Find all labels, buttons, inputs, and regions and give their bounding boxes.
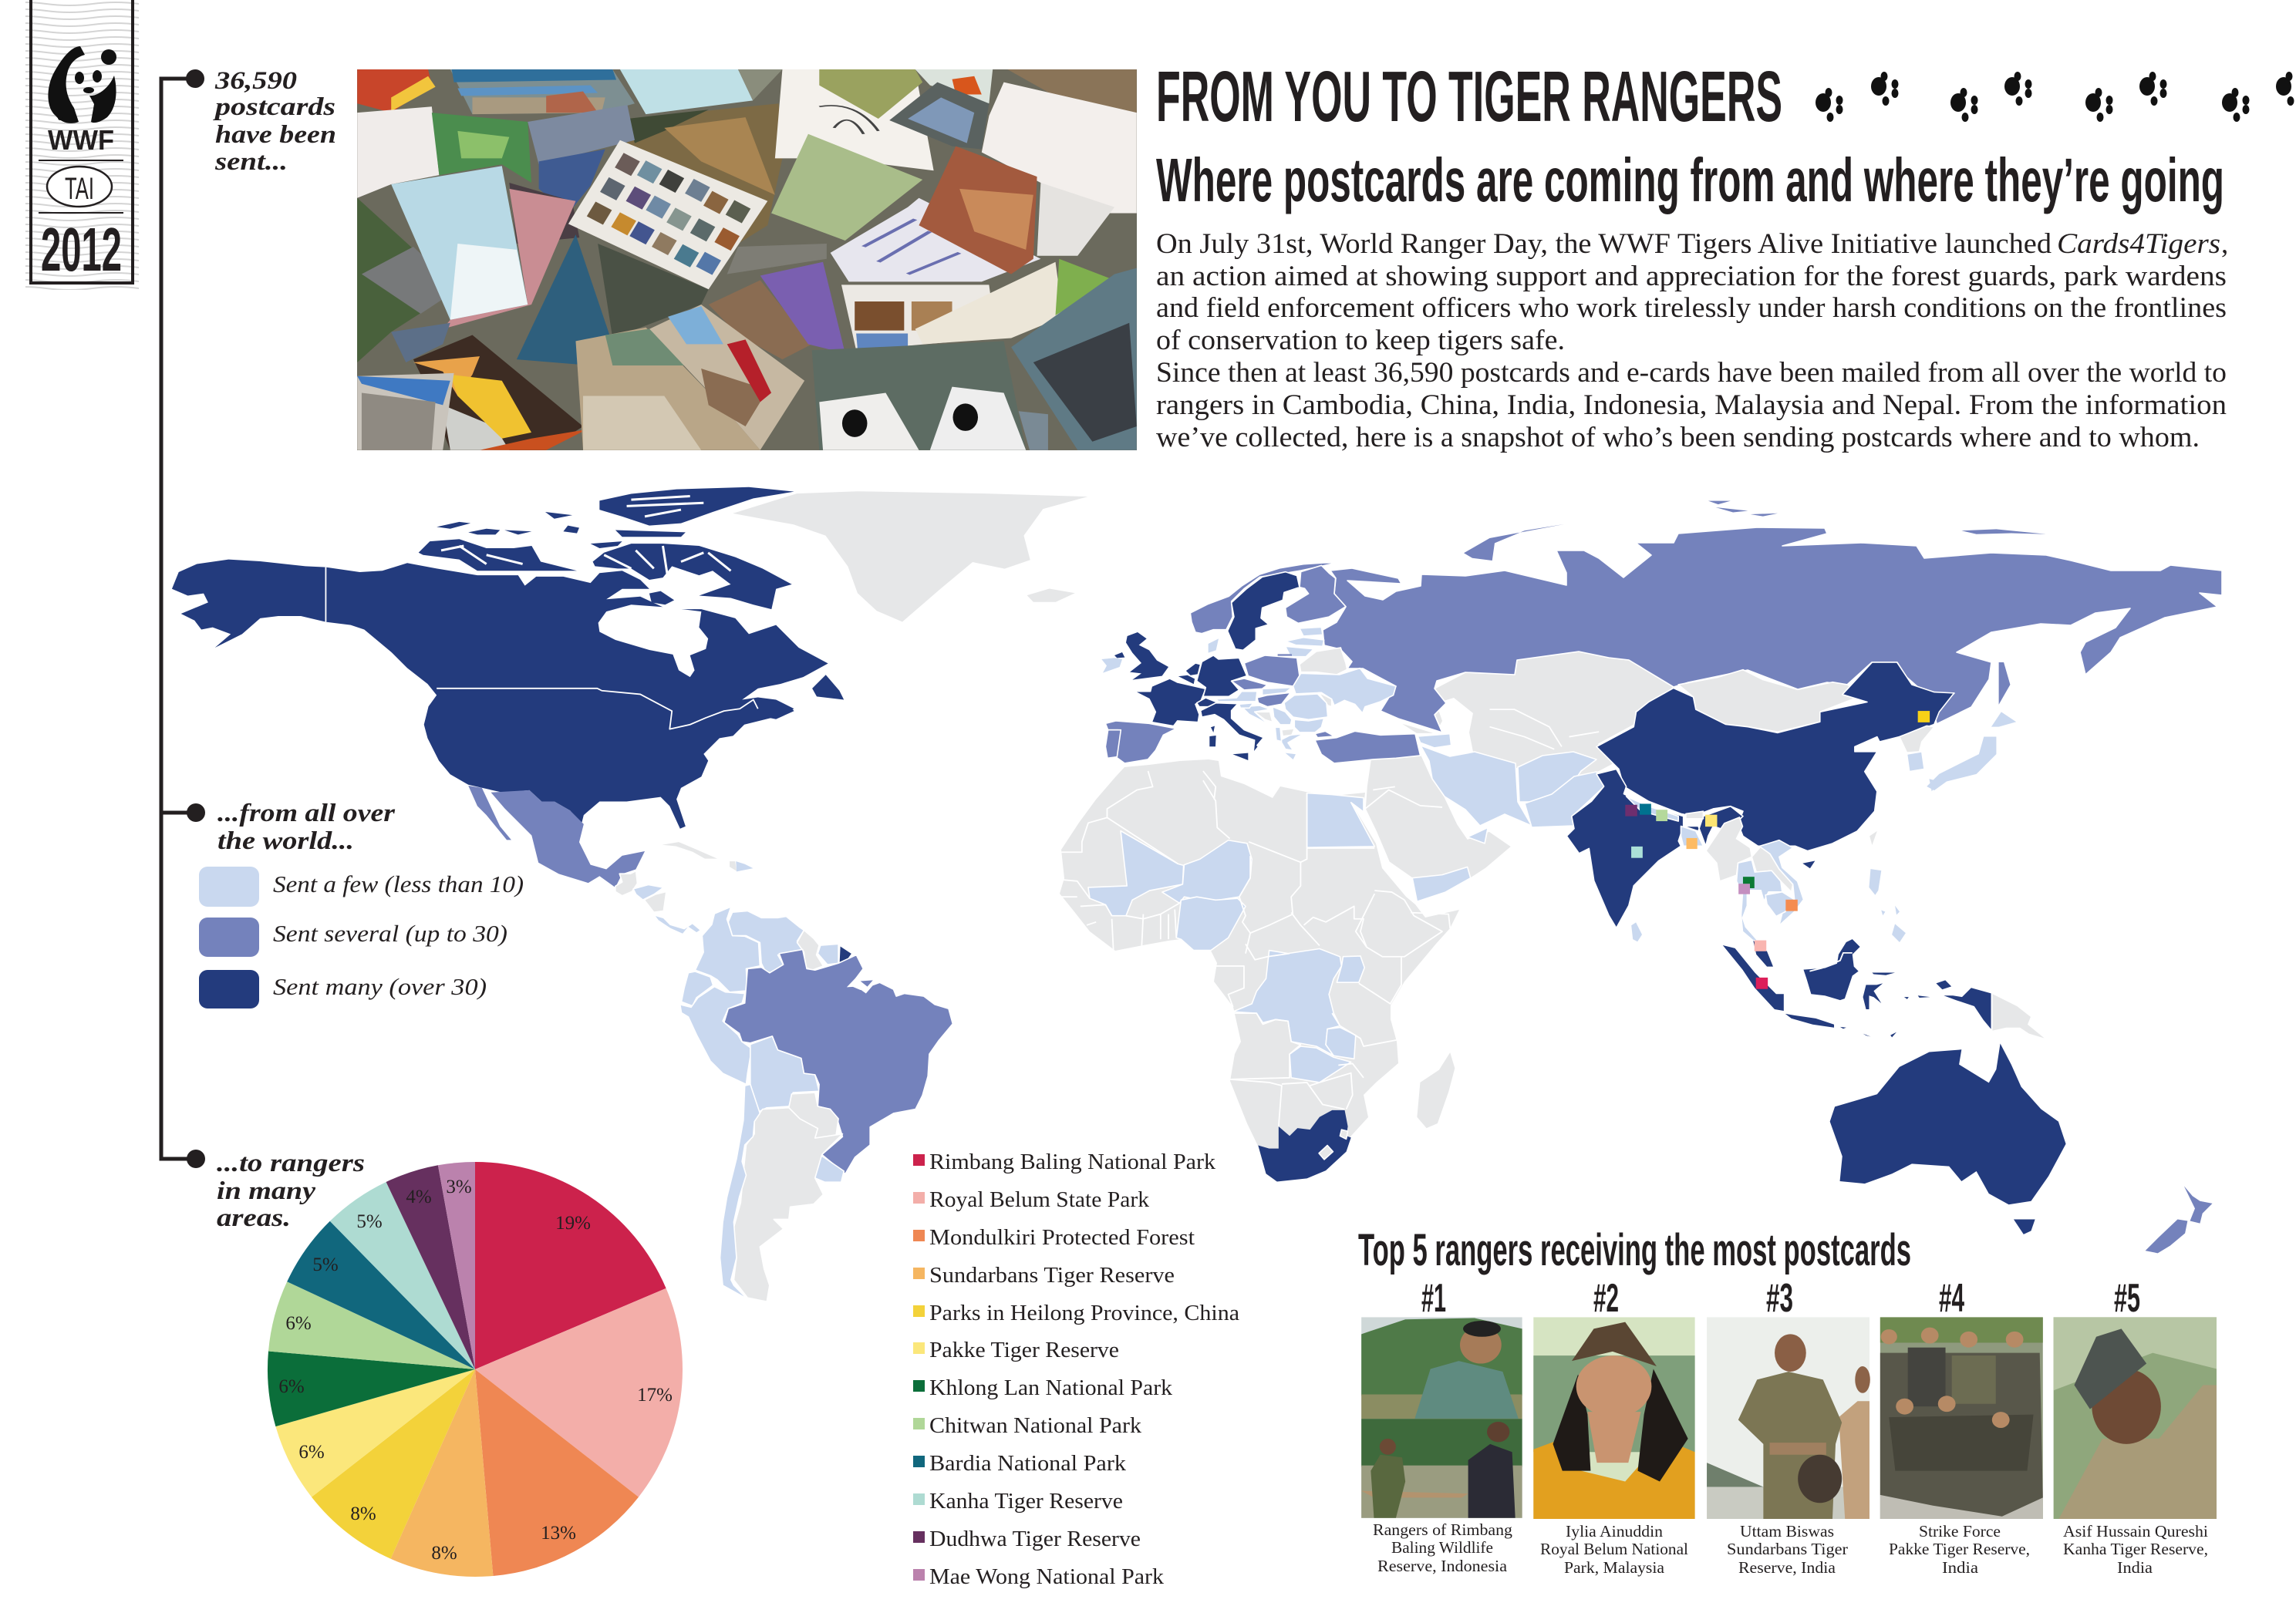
text block: introduction: ,	[2221, 228, 2228, 260]
icon: WWF panda	[48, 46, 116, 123]
heading: to rangers in many areas: in many	[217, 1177, 315, 1205]
pie chart: postcards by ranger area	[268, 1162, 683, 1577]
heading: top 5 rangers: Top 5 rangers receiving the most postcards	[1358, 1225, 1911, 1275]
photo 2: Iylia Ainuddin	[1533, 1317, 1695, 1520]
rank numbers: #1	[1421, 1276, 1446, 1321]
pie chart: postcards by ranger area: 17%	[637, 1385, 673, 1406]
ranger captions: Royal Belum National	[1540, 1540, 1688, 1558]
text block: introduction: Since then at least 36,590 postcards and e-cards have been mailed from all over the world to	[1156, 357, 2227, 389]
pie chart: postcards by ranger area: 19%	[555, 1213, 591, 1234]
pie legend: ranger areas: Chitwan National Park	[929, 1414, 1141, 1438]
ranger captions: Park, Malaysia	[1564, 1558, 1665, 1577]
ranger captions: Baling Wildlife	[1391, 1538, 1493, 1557]
text: 36,590 postcards have been sent: have been	[215, 121, 336, 149]
ranger captions: Reserve, Indonesia	[1377, 1557, 1508, 1575]
map: Africa	[1060, 759, 1459, 1181]
map legend: Sent several (up to 30)	[273, 920, 507, 947]
ranger captions: Rangers of Rimbang	[1373, 1520, 1513, 1539]
text: 36,590 postcards have been sent: 36,590	[214, 67, 297, 95]
text: 36,590 postcards have been sent: sent...	[214, 148, 288, 176]
ranger captions	[1373, 1520, 2208, 1577]
text block: introduction: Cards4Tigers	[2057, 228, 2220, 260]
timeline bracket with three dots	[161, 69, 205, 1168]
photo 5: Asif Hussain Qureshi	[2054, 1317, 2217, 1520]
photo: postcard collage	[357, 69, 1137, 450]
icon: paw prints trail	[1816, 72, 2296, 122]
map: Southeast Asia and Indonesia	[1631, 817, 2045, 1039]
map: Russia	[1323, 501, 2222, 732]
heading: from all over the world: ...from all over	[217, 800, 396, 827]
rank numbers	[1421, 1276, 2140, 1321]
rank numbers: #4	[1939, 1276, 1964, 1321]
map legend: Sent a few (less than 10)	[273, 870, 524, 897]
ranger captions: Kanha Tiger Reserve,	[2063, 1540, 2208, 1558]
title: FROM YOU TO TIGER RANGERS	[1156, 56, 1782, 136]
map markers: ranger areas	[1625, 711, 1930, 989]
map: North America	[172, 487, 844, 887]
rank numbers: #2	[1593, 1276, 1619, 1321]
pie chart: postcards by ranger area: 4%	[406, 1187, 432, 1207]
map legend: Sent many (over 30)	[273, 973, 487, 1000]
map: Greenland and Iceland	[733, 491, 1087, 622]
pie legend: ranger areas: Mondulkiri Protected Forest	[929, 1226, 1195, 1250]
pie chart: postcards by ranger area: 5%	[312, 1254, 339, 1275]
logo panel: WWF TAI 2012: WWF	[48, 124, 114, 156]
pie chart: postcards by ranger area: 3%	[446, 1177, 472, 1197]
ranger captions: Asif Hussain Qureshi	[2063, 1522, 2208, 1541]
pie chart: postcards by ranger area: 5%	[356, 1211, 383, 1232]
map: Middle East and Central Asia	[1365, 652, 1674, 901]
heading: to rangers in many areas	[217, 1150, 365, 1232]
heading: from all over the world	[217, 800, 396, 855]
Hudson Bay	[598, 604, 708, 677]
text block: introduction	[1156, 228, 2228, 453]
ranger captions: Reserve, India	[1738, 1558, 1836, 1577]
rank numbers: #3	[1766, 1276, 1793, 1321]
pie chart: postcards by ranger area: 6%	[278, 1376, 305, 1397]
photo 4: Strike Force	[1880, 1317, 2043, 1520]
ranger captions: Sundarbans Tiger	[1727, 1540, 1848, 1558]
text block: introduction: and field enforcement officers who work tirelessly under harsh conditions on the frontlines	[1156, 292, 2227, 324]
ranger captions: India	[2117, 1558, 2153, 1577]
pie legend: ranger areas: Rimbang Baling National Park	[929, 1150, 1215, 1174]
heading: from all over the world: the world...	[217, 827, 354, 855]
ranger captions: Pakke Tiger Reserve,	[1889, 1540, 2030, 1558]
pie chart: postcards by ranger area: 8%	[431, 1543, 457, 1564]
photo 3: Uttam Biswas	[1707, 1317, 1870, 1520]
pie legend: ranger areas: Bardia National Park	[929, 1452, 1126, 1476]
text block: introduction: an action aimed at showing support and appreciation for the forest guards, park wardens	[1156, 261, 2227, 292]
pie legend: ranger areas: Sundarbans Tiger Reserve	[929, 1264, 1175, 1288]
text: 36,590 postcards have been sent	[212, 67, 336, 176]
logo panel: WWF TAI 2012: 2012	[41, 215, 122, 284]
photo 1: rangers of Rimbang Baling	[1361, 1317, 1522, 1518]
pie legend: ranger areas: Parks in Heilong Province, China	[929, 1301, 1240, 1325]
pie chart: postcards by ranger area: 6%	[285, 1313, 312, 1334]
map: Central and South America	[615, 842, 952, 1301]
pie legend: ranger areas	[913, 1150, 1240, 1589]
text block: introduction: we’ve collected, here is a snapshot of who’s been sending postcards where and to whom.	[1156, 422, 2200, 453]
map: Europe	[1101, 563, 1451, 763]
map: Australia and New Zealand	[1830, 1044, 2213, 1253]
pie chart: postcards by ranger area: 8%	[350, 1503, 376, 1524]
pie legend: ranger areas: Pakke Tiger Reserve	[929, 1338, 1119, 1362]
logo panel: WWF TAI 2012: TAI	[65, 172, 94, 206]
pie legend: ranger areas: Royal Belum State Park	[929, 1188, 1149, 1212]
pie legend: ranger areas: Kanha Tiger Reserve	[929, 1490, 1123, 1514]
text block: introduction: rangers in Cambodia, China, India, Indonesia, Malaysia and Nepal. From the information	[1156, 389, 2227, 421]
pie legend: ranger areas: Mae Wong National Park	[929, 1565, 1164, 1589]
ranger photos	[1361, 1317, 2217, 1520]
map: East and South Asia	[1566, 662, 2016, 928]
ranger captions: Iylia Ainuddin	[1566, 1522, 1664, 1541]
rank numbers: #5	[2114, 1276, 2140, 1321]
map legend	[199, 867, 524, 1008]
world map	[172, 487, 2222, 1301]
ranger captions: Strike Force	[1919, 1522, 2001, 1541]
heading: to rangers in many areas: ...to rangers	[217, 1150, 365, 1177]
pie chart: postcards by ranger area: 13%	[541, 1523, 576, 1544]
heading: to rangers in many areas: areas.	[217, 1204, 291, 1232]
pie legend: ranger areas: Dudhwa Tiger Reserve	[929, 1527, 1141, 1551]
text: 36,590 postcards have been sent: postcards	[212, 93, 335, 121]
ranger captions: Uttam Biswas	[1740, 1522, 1834, 1541]
pie legend: ranger areas: Khlong Lan National Park	[929, 1376, 1172, 1400]
pie chart: postcards by ranger area: 6%	[298, 1442, 325, 1463]
logo panel: WWF TAI 2012	[25, 0, 139, 290]
ranger captions: India	[1942, 1558, 1979, 1577]
text block: introduction: On July 31st, World Ranger Day, the WWF Tigers Alive Initiative launched	[1156, 228, 2052, 260]
text block: introduction: of conservation to keep tigers safe.	[1156, 325, 1565, 356]
